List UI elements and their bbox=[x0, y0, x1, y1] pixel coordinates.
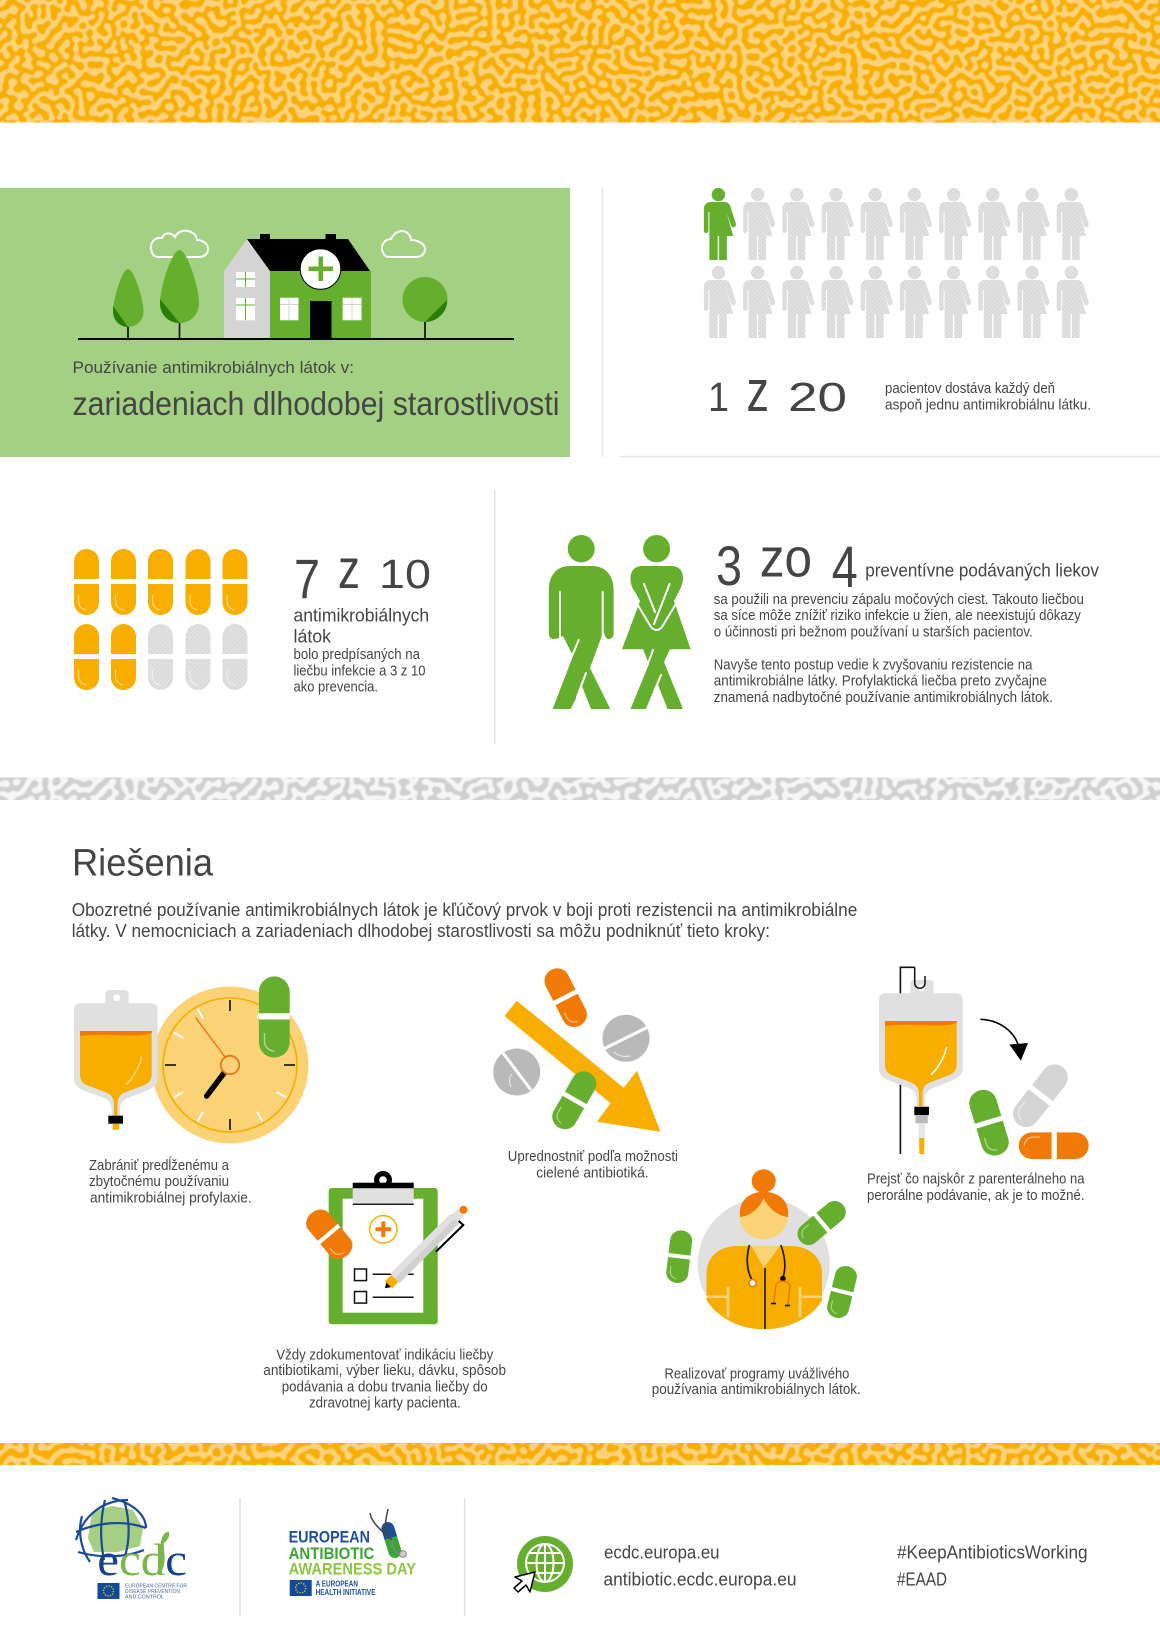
divider lines bbox=[602, 188, 1160, 457]
logo: European Antibiotic Awareness Day bbox=[289, 1509, 416, 1597]
stat: 7 z 10: 10 bbox=[379, 551, 431, 597]
heading: setting: zariadeniach dlhodobej starostlivosti bbox=[72, 385, 560, 422]
wordmark: EUROPEAN bbox=[289, 1529, 370, 1547]
text: prevent prolonged prophylaxis: Zabrániť predĺženému a bbox=[89, 1156, 230, 1174]
text: 7 in 10 description: ako prevencia. bbox=[294, 680, 378, 696]
icon: care home building bbox=[224, 234, 371, 339]
globe bbox=[76, 1498, 146, 1562]
capsules bbox=[665, 1229, 693, 1284]
wordmark: ecdc bbox=[97, 1534, 187, 1585]
hook bbox=[915, 967, 925, 988]
stethoscope bbox=[747, 1245, 790, 1306]
text: 1 in 20 description: pacientov dostáva každý deň bbox=[885, 381, 1055, 397]
text: switch to oral bbox=[867, 1171, 1085, 1204]
head and hair bbox=[740, 1169, 788, 1239]
stat: 1 z 20: 20 bbox=[788, 374, 847, 420]
icon: man and woman figures bbox=[549, 535, 691, 709]
icon: clock, infusion bag and capsule bbox=[74, 976, 308, 1144]
heading: solutions: Riešenia bbox=[72, 843, 214, 885]
icon: clipboard with capsule and pen bbox=[301, 1171, 471, 1324]
text: targeted antibiotics bbox=[508, 1149, 678, 1181]
text: 7 in 10 description bbox=[294, 606, 429, 696]
text: prevent prolonged prophylaxis bbox=[89, 1156, 252, 1206]
text: 7 in 10 description: látok bbox=[294, 627, 332, 647]
sprout bbox=[157, 1532, 169, 1574]
stat: 3 zo 4: 4 bbox=[832, 535, 858, 600]
text: stewardship programmes: používania antimikrobiálnych látok. bbox=[652, 1382, 861, 1398]
text: hashtags: #KeepAntibioticsWorking bbox=[897, 1542, 1088, 1562]
gray pattern band bbox=[0, 778, 1160, 800]
organisation name: DISEASE PREVENTION bbox=[125, 1589, 180, 1595]
text: prevention paragraphs bbox=[714, 592, 1084, 706]
text: prevention paragraphs: o účinnosti pri bežnom používaní u starších pacientov. bbox=[714, 625, 1033, 641]
stat: 1 z 20: 1 bbox=[708, 374, 729, 420]
capsule with stethoscope bbox=[370, 1509, 406, 1560]
wordmark bbox=[289, 1529, 416, 1578]
orange capsule bbox=[540, 964, 591, 1031]
tube and connector bbox=[914, 1107, 929, 1154]
infusion bag bbox=[74, 990, 158, 1130]
chart: 7 in 10 capsules bbox=[74, 549, 248, 690]
text: 7 in 10 description: liečbu infekcie a 3 z 10 bbox=[294, 664, 426, 680]
stat: 7 z 10: z bbox=[338, 537, 360, 600]
text: prevention paragraphs: sa použili na prevenciu zápalu močových ciest. Takouto liečbou bbox=[714, 592, 1084, 608]
panel: title with care home illustration bbox=[0, 188, 570, 457]
wordmark: ANTIBIOTIC bbox=[289, 1545, 374, 1563]
icon: arrow with targeted antibiotics bbox=[493, 964, 660, 1134]
stat: 7 z 10: 7 bbox=[294, 547, 320, 610]
text: 7 in 10 description: antimikrobiálnych bbox=[294, 606, 429, 626]
organisation name: EUROPEAN CENTRE FOR bbox=[125, 1584, 187, 1590]
icon: doctor with capsules bbox=[665, 1169, 859, 1329]
text: intro label: Používanie antimikrobiálnych látok v: bbox=[72, 358, 354, 377]
icon: man bbox=[549, 535, 614, 709]
EU flag bbox=[290, 1580, 312, 1596]
tagline bbox=[316, 1580, 376, 1597]
text: hashtags bbox=[897, 1542, 1088, 1590]
orange capsule bbox=[301, 1205, 357, 1264]
icon: clouds bbox=[151, 231, 425, 257]
logo: ecdc bbox=[76, 1498, 187, 1600]
gray people bbox=[704, 188, 1089, 338]
text: solutions intro bbox=[72, 900, 857, 941]
top pattern band bbox=[0, 0, 1160, 122]
tagline: HEALTH INITIATIVE bbox=[316, 1588, 376, 1597]
text: stewardship programmes bbox=[652, 1366, 861, 1398]
gray capsules bbox=[148, 624, 248, 690]
chart: 1 in 20 people pictogram bbox=[704, 188, 1089, 338]
stat: 3 zo 4: 3 bbox=[716, 534, 742, 597]
checklist bbox=[354, 1269, 414, 1303]
text: 7 in 10 description: bolo predpísaných na bbox=[294, 647, 421, 663]
clock bbox=[152, 986, 308, 1144]
cross badge bbox=[370, 1216, 397, 1243]
text: document indication: Vždy zdokumentovať indikáciu liečby bbox=[276, 1347, 494, 1363]
arrow bbox=[504, 1001, 660, 1132]
icon: highlighted person bbox=[704, 188, 736, 260]
text: 1 in 20 description: aspoň jednu antimikrobiálnu látku. bbox=[885, 397, 1091, 413]
text: document indication: podávania a dobu trvania liečby do bbox=[282, 1380, 488, 1396]
stand bbox=[900, 967, 915, 1154]
text: prevent prolonged prophylaxis: zbytočnému používaniu bbox=[89, 1174, 229, 1190]
icon: woman bbox=[622, 535, 691, 709]
text: document indication bbox=[263, 1347, 506, 1412]
pen bbox=[380, 1202, 471, 1293]
text: websites: ecdc.europa.eu bbox=[604, 1542, 720, 1562]
capsule bbox=[259, 976, 290, 1058]
divider bbox=[494, 490, 495, 744]
text: switch to oral: perorálne podávanie, ak je to možné. bbox=[867, 1188, 1084, 1204]
organisation name: AND CONTROL bbox=[125, 1594, 164, 1600]
text: solutions intro: látky. V nemocniciach a zariadeniach dlhodobej starostlivosti sa môžu podniknúť tieto kroky: bbox=[72, 921, 770, 941]
text: document indication: zdravotnej karty pacienta. bbox=[309, 1396, 461, 1412]
stat: 3 zo 4: zo bbox=[760, 527, 812, 589]
EU flag bbox=[98, 1583, 120, 1599]
text: solutions intro: Obozretné používanie antimikrobiálnych látok je kľúčový prvok v boji proti rezistencii na antimikrobiálne bbox=[72, 900, 857, 920]
clip bbox=[353, 1171, 414, 1205]
text: prevention paragraphs: znamená nadbytočné používanie antimikrobiálnych látok. bbox=[714, 690, 1053, 706]
uniform bbox=[706, 1246, 822, 1329]
text: preventive lead line: preventívne podávaných liekov bbox=[865, 561, 1099, 581]
wordmark: AWARENESS DAY bbox=[289, 1560, 416, 1578]
text: 1 in 20 description bbox=[885, 381, 1091, 413]
capsules bbox=[966, 1086, 1012, 1159]
text: websites: antibiotic.ecdc.europa.eu bbox=[604, 1570, 796, 1590]
text: hashtags: #EAAD bbox=[897, 1570, 947, 1590]
organisation name bbox=[125, 1584, 187, 1600]
icon: trees bbox=[113, 250, 448, 339]
green capsule bbox=[548, 1067, 601, 1134]
gold capsules bbox=[74, 549, 248, 690]
text: prevention paragraphs: Navyše tento postup vedie k zvyšovaniu rezistencie na bbox=[714, 657, 1033, 673]
text: prevention paragraphs: antimikrobiálne látky. Profylaktická liečba preto zvyčajne bbox=[714, 673, 1047, 689]
text: prevent prolonged prophylaxis: antimikrobiálnej profylaxie. bbox=[90, 1190, 252, 1206]
gray tablets bbox=[493, 1015, 650, 1096]
footer dividers bbox=[240, 1498, 465, 1616]
icon: infusion bag switching to oral capsules bbox=[879, 967, 1089, 1159]
text: stewardship programmes: Realizovať programy uvážlivého bbox=[664, 1366, 849, 1382]
text: document indication: antibiotikami, výber lieku, dávku, spôsob bbox=[263, 1363, 506, 1379]
text: websites bbox=[604, 1542, 796, 1590]
icon: web globe with cursor bbox=[514, 1536, 573, 1592]
stat: 1 z 20: z bbox=[746, 359, 769, 424]
text: targeted antibiotics: cielené antibiotiká. bbox=[536, 1165, 649, 1181]
tagline: A EUROPEAN bbox=[316, 1580, 358, 1589]
text: targeted antibiotics: Uprednostniť podľa možnosti bbox=[508, 1149, 678, 1165]
curved arrow bbox=[980, 1019, 1028, 1061]
text: switch to oral: Prejsť čo najskôr z parenterálneho na bbox=[867, 1171, 1085, 1187]
text: prevention paragraphs: sa síce môže znížiť riziko infekcie u žien, ale neexistujú dôkazy bbox=[714, 608, 1081, 624]
ground line bbox=[78, 338, 514, 340]
bottom pattern band bbox=[0, 1443, 1160, 1465]
infusion bag bbox=[879, 980, 963, 1106]
